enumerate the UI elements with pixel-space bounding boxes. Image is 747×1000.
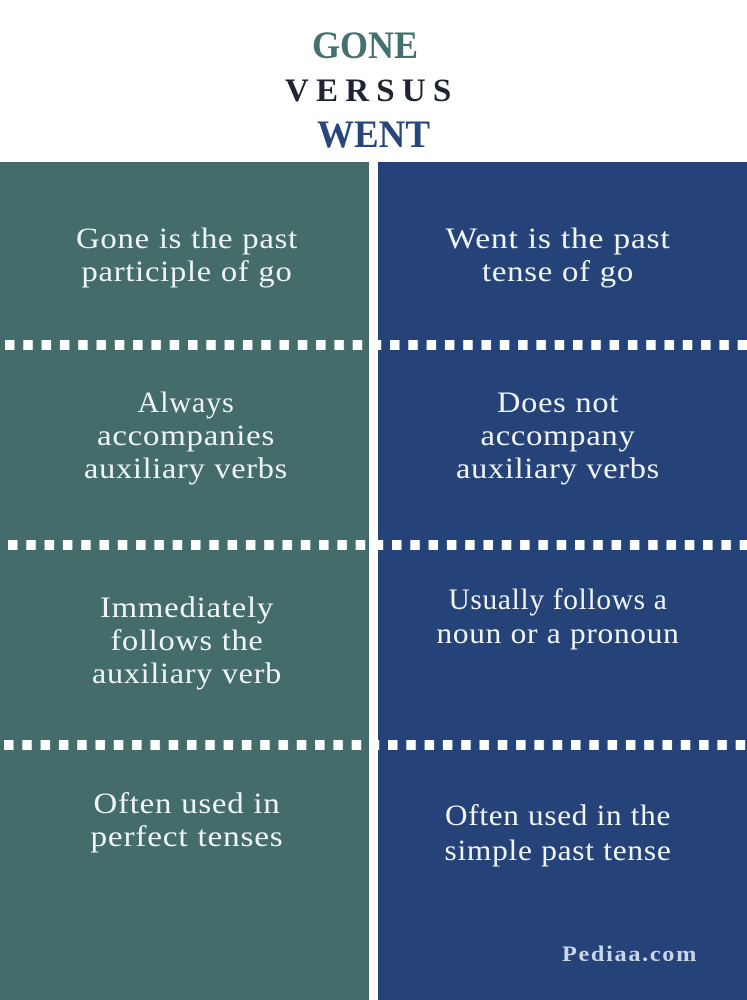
panel: gone: auxiliary verbs bbox=[84, 452, 288, 485]
panel: gone: participle of go bbox=[82, 255, 292, 288]
text: auxiliary went: Does not bbox=[497, 386, 619, 419]
panel: went: auxiliary verbs bbox=[456, 452, 660, 485]
panel: went: simple past tense bbox=[444, 834, 672, 867]
title bbox=[285, 24, 458, 156]
text: position went: Usually follows a bbox=[448, 583, 668, 616]
panel: gone: auxiliary verb bbox=[92, 657, 282, 690]
logo: Pediaa.com: Pediaa.com bbox=[562, 941, 698, 966]
panel: gone: follows the bbox=[110, 624, 264, 657]
panel: gone bbox=[0, 162, 369, 1000]
text: usage went: Often used in the bbox=[445, 799, 671, 832]
panel: went: tense of go bbox=[482, 255, 634, 288]
text: definition went: Went is the past bbox=[446, 222, 670, 255]
panel: gone: accompanies bbox=[97, 419, 275, 452]
panel: gone: perfect tenses bbox=[90, 820, 284, 853]
panel: went bbox=[378, 162, 747, 1000]
text: usage gone: Often used in bbox=[94, 787, 280, 820]
title: VERSUS bbox=[285, 73, 458, 109]
text: position gone: Immediately bbox=[100, 591, 274, 624]
text: auxiliary gone: Always bbox=[138, 386, 234, 419]
text: definition gone: Gone is the past bbox=[76, 222, 298, 255]
title: WENT bbox=[317, 113, 430, 156]
title: GONE bbox=[312, 24, 418, 67]
panel: went: accompany bbox=[480, 419, 636, 452]
panel: went: noun or a pronoun bbox=[436, 617, 680, 650]
